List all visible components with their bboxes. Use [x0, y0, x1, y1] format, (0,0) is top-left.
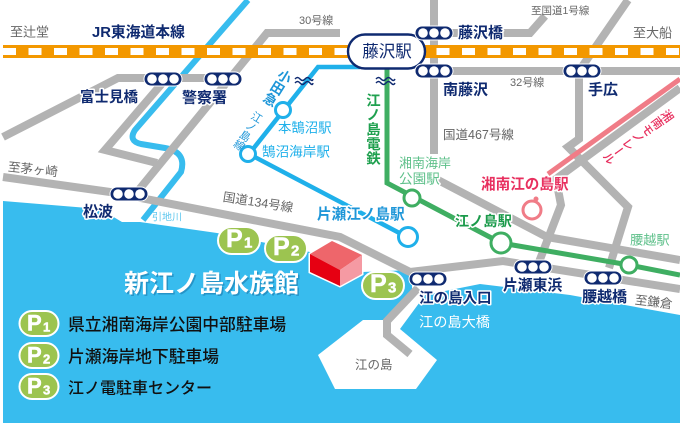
legend item P1 [20, 310, 286, 336]
station badges [110, 26, 622, 286]
train stop labels: 手広 [588, 82, 618, 98]
train stop labels: 腰越橋 [582, 288, 627, 306]
Odakyu labels: 片瀬江ノ島駅 [317, 205, 405, 223]
icon: aquarium building [310, 241, 362, 286]
legend item P1: P [27, 310, 42, 336]
Odakyu labels: 引地川 [152, 210, 182, 224]
Fujisawa station: 藤沢駅 [362, 42, 412, 61]
place and road labels: 国道134号線 [222, 189, 295, 215]
monorail labels [481, 106, 676, 193]
river: 引地川 [133, 0, 248, 220]
train stop labels: 片瀬東浜 [503, 277, 562, 294]
legend: parking list [20, 310, 286, 399]
aquarium title: 新江ノ島水族館 [126, 272, 301, 300]
Odakyu labels [152, 66, 405, 224]
parking markers on map: P [226, 225, 243, 253]
Enoden labels: 江ノ島電鉄 [364, 93, 380, 166]
legend item P3: 3 [43, 382, 50, 398]
parking markers on map: 1 [244, 234, 252, 252]
legend item P2: 2 [43, 352, 50, 366]
place and road labels: 至茅ヶ崎 [7, 160, 59, 179]
Enoden labels: 江ノ島駅 [455, 213, 512, 230]
icon: Shonan Enoshima station [523, 196, 541, 219]
sea [3, 201, 680, 423]
place and road labels: 至大船 [633, 26, 672, 40]
Odakyu labels: 本鵠沼駅 [278, 120, 332, 136]
aquarium title: 新江ノ島水族館 [124, 270, 299, 298]
Enoshima bridge label: 江の島大橋 [419, 314, 490, 331]
legend item P3: 江ノ電駐車センター [68, 380, 212, 398]
place and road labels: 30号線 [299, 14, 333, 27]
train stop labels [80, 23, 627, 307]
legend item P3: P [27, 374, 42, 398]
parking markers on map: 2 [291, 242, 299, 260]
parking markers on map: P [370, 270, 387, 298]
Odakyu Enoshima line [240, 67, 418, 246]
train stop labels: 南藤沢 [443, 82, 488, 98]
place and road labels: 国道467号線 [443, 127, 514, 142]
legend item P3 [20, 374, 212, 399]
JR Tokaido line [3, 45, 680, 58]
legend item P2: P [27, 342, 42, 368]
train stop labels: 富士見橋 [80, 88, 138, 106]
place and road labels: 至鎌倉 [634, 292, 674, 312]
parking markers on map: P [273, 233, 290, 261]
legend item P2 [20, 342, 219, 368]
place and road labels: 32号線 [510, 76, 544, 89]
train stop labels: JR東海道本線 [92, 23, 185, 41]
parking markers on map: 3 [388, 280, 396, 296]
Enoden line [387, 66, 680, 275]
place and road labels: 江の島 [355, 357, 393, 372]
train stop labels: 警察署 [182, 88, 227, 106]
parking markers on map [218, 225, 404, 299]
Enoden labels [364, 93, 670, 248]
Odakyu labels: 鵠沼海岸駅 [262, 144, 330, 160]
train stop labels: 松波 [83, 202, 113, 220]
Enoden labels: 湘南海岸 [399, 156, 451, 170]
Odakyu labels: 江ノ島線 [231, 109, 265, 153]
place and road labels: 至国道1号線 [531, 4, 590, 17]
monorail labels: 湘南江の島駅 [481, 175, 569, 193]
train stop labels: 藤沢橋 [458, 24, 503, 42]
train stop labels: 江の島入口 [419, 289, 492, 307]
legend item P1: 県立湘南海岸公園中部駐車場 [68, 316, 286, 334]
legend item P2: 片瀬海岸地下駐車場 [68, 348, 219, 366]
legend item P1: 1 [43, 320, 50, 334]
monorail line [548, 79, 680, 174]
monorail labels: 湘南モノレール [600, 106, 676, 167]
Odakyu labels: 小田急 [259, 66, 294, 109]
Enoden labels: 腰越駅 [630, 232, 670, 248]
Enoden labels: 公園駅 [399, 172, 440, 186]
Fujisawa station [348, 34, 425, 68]
icon: river waves [295, 78, 395, 84]
place and road labels: 至辻堂 [10, 24, 49, 40]
